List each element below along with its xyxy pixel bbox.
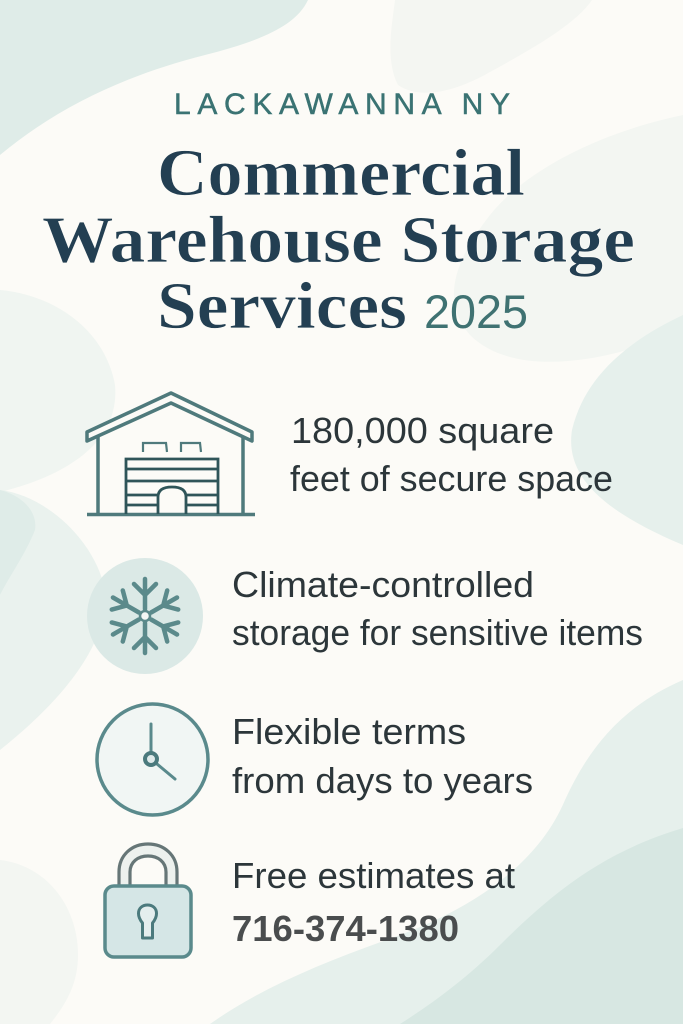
text: square feet: 180,000 square xyxy=(291,410,554,451)
text: free estimates xyxy=(232,855,515,949)
title: Commercial xyxy=(157,136,525,210)
title: Warehouse Storage xyxy=(42,203,635,277)
text: climate-controlled: Climate-controlled xyxy=(232,564,534,605)
text: climate-controlled xyxy=(232,564,643,653)
text: free estimates: Free estimates at xyxy=(232,855,515,896)
text: square feet xyxy=(290,410,613,499)
text: free estimates: 716-374-1380 xyxy=(232,908,459,949)
title xyxy=(42,136,635,343)
text: flexible terms: from days to years xyxy=(232,760,533,801)
text: flexible terms xyxy=(232,711,533,801)
eyebrow: location: LACKAWANNA NY xyxy=(174,88,510,121)
icon: padlock xyxy=(105,844,191,957)
title: Services xyxy=(157,269,407,343)
icon: clock xyxy=(97,704,208,815)
text: square feet: feet of secure space xyxy=(290,458,613,499)
icon: snowflake xyxy=(87,558,203,674)
title: 2025 xyxy=(424,285,528,338)
text: flexible terms: Flexible terms xyxy=(232,711,466,752)
icon: warehouse xyxy=(87,393,255,514)
text: climate-controlled: storage for sensitive items xyxy=(232,612,643,653)
